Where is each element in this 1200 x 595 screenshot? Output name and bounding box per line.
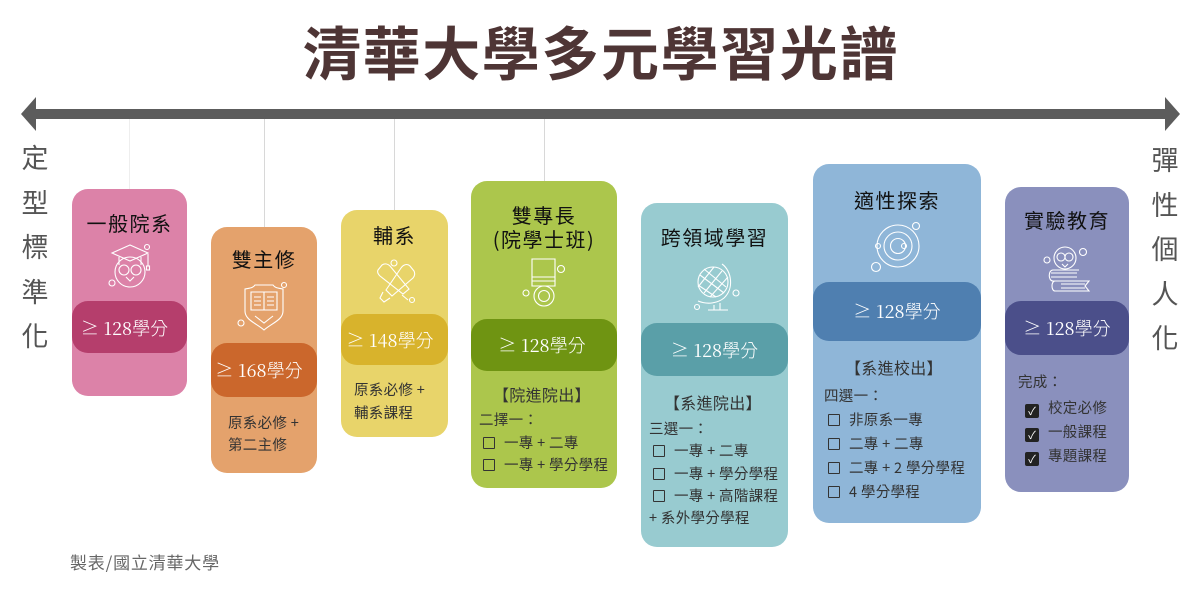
heading: 實驗教育 bbox=[1024, 205, 1110, 234]
heading: 雙專長 bbox=[512, 200, 576, 229]
text: options: 二專 + 二專 bbox=[849, 433, 924, 454]
panel: 雙主修 bbox=[211, 227, 317, 473]
heading: 一般院系 bbox=[86, 208, 172, 237]
text: pathway: 【系進院出】 bbox=[664, 390, 762, 414]
heading: 適性探索 bbox=[854, 185, 940, 214]
credit band: ≥ 168學分 bbox=[215, 357, 303, 383]
text: options bbox=[479, 409, 608, 475]
axis label: right bbox=[1152, 139, 1178, 356]
text: requirements bbox=[354, 379, 425, 423]
axis label: left: 型 bbox=[22, 182, 48, 220]
axis label: right: 個 bbox=[1152, 228, 1178, 267]
credit band bbox=[471, 319, 617, 371]
heading: 輔系 bbox=[373, 220, 416, 249]
axis label: right: 人 bbox=[1152, 272, 1178, 312]
icon: orbit bbox=[871, 222, 920, 272]
axis label: right: 性 bbox=[1152, 184, 1178, 222]
checklist: ✓ bbox=[1028, 451, 1036, 467]
credit band: ≥ 128學分 bbox=[671, 337, 758, 363]
text: requirements bbox=[228, 412, 299, 455]
text: pathway: 【院進院出】 bbox=[493, 382, 591, 406]
text: requirements intro: 完成： bbox=[1018, 371, 1062, 392]
axis label: right: 化 bbox=[1152, 317, 1178, 356]
checklist: ✓ bbox=[1028, 403, 1036, 419]
icon: owl on books bbox=[1044, 246, 1090, 292]
panel: 一般院系 bbox=[72, 189, 187, 396]
checklist: 專題課程 bbox=[1048, 445, 1107, 466]
axis label: left: 準 bbox=[22, 270, 48, 310]
heading: 雙主修 bbox=[232, 244, 296, 273]
text: options: 非原系一專 bbox=[849, 409, 923, 430]
text: options: 四選一： bbox=[824, 385, 883, 406]
axis label: right: 彈 bbox=[1152, 139, 1178, 178]
axis label: left: 化 bbox=[22, 315, 48, 354]
axis label: left: 定 bbox=[22, 137, 48, 176]
credit band: ≥ 148學分 bbox=[346, 327, 434, 353]
icon: shield with book bbox=[238, 282, 287, 331]
icon: crossed tools bbox=[377, 260, 416, 303]
text: options: 三選一： bbox=[649, 418, 708, 439]
icon: book and medal bbox=[522, 258, 565, 306]
text: options: 一專 + 學分學程 bbox=[674, 463, 778, 484]
text: options: 一專 + 二專 bbox=[674, 440, 749, 461]
credit band bbox=[211, 343, 317, 397]
heading: (院學士班) bbox=[493, 224, 595, 253]
text: options: 一專 + 高階課程 bbox=[674, 485, 778, 506]
credit band bbox=[1005, 301, 1129, 355]
credit band bbox=[641, 323, 788, 376]
checklist: ✓ bbox=[1028, 427, 1036, 443]
text: requirements: 輔系課程 bbox=[354, 402, 413, 423]
text: options: 一專 + 學分學程 bbox=[504, 454, 608, 475]
panel: 實驗教育 bbox=[1005, 187, 1129, 492]
text: pathway: 【系進校出】 bbox=[845, 355, 943, 379]
panel: 雙專長 bbox=[471, 181, 617, 488]
text: requirements: 第二主修 bbox=[228, 434, 287, 455]
credit note: 製表/國立清華大學 bbox=[70, 549, 220, 574]
credit band: ≥ 128學分 bbox=[1023, 315, 1111, 341]
credit band: ≥ 128學分 bbox=[81, 315, 168, 341]
checklist: 一般課程 bbox=[1048, 421, 1107, 442]
icon: globe bbox=[694, 264, 740, 310]
credit band bbox=[813, 282, 981, 341]
credit band bbox=[341, 314, 448, 365]
text: options: 二專 + 2 學分學程 bbox=[849, 457, 965, 478]
text: options bbox=[649, 418, 778, 528]
credit band: ≥ 128學分 bbox=[498, 332, 586, 358]
arrow: spectrum axis bbox=[21, 97, 1180, 131]
panel: 輔系 bbox=[341, 210, 448, 437]
text: requirements: 原系必修 + bbox=[354, 379, 425, 400]
panel: 適性探索 bbox=[813, 164, 981, 523]
checklist bbox=[1025, 397, 1107, 467]
axis label: left bbox=[22, 137, 48, 354]
checklist: 校定必修 bbox=[1048, 397, 1107, 418]
axis label: left: 標 bbox=[22, 226, 48, 265]
text: options: 一專 + 二專 bbox=[504, 432, 579, 452]
credit band bbox=[72, 301, 187, 353]
heading bbox=[493, 200, 595, 253]
panel: 跨領域學習 bbox=[641, 203, 788, 547]
text: requirements: 原系必修 + bbox=[228, 412, 299, 433]
credit band: ≥ 128學分 bbox=[853, 298, 941, 324]
text: options bbox=[824, 385, 965, 502]
heading: 跨領域學習 bbox=[661, 222, 768, 251]
icon: owl with graduation cap bbox=[108, 244, 150, 288]
text: options: 二擇一： bbox=[479, 409, 538, 430]
title: 清華大學多元學習光譜 bbox=[303, 8, 899, 92]
text: options: 4 學分學程 bbox=[849, 481, 920, 502]
text: options: + 系外學分學程 bbox=[649, 507, 750, 528]
